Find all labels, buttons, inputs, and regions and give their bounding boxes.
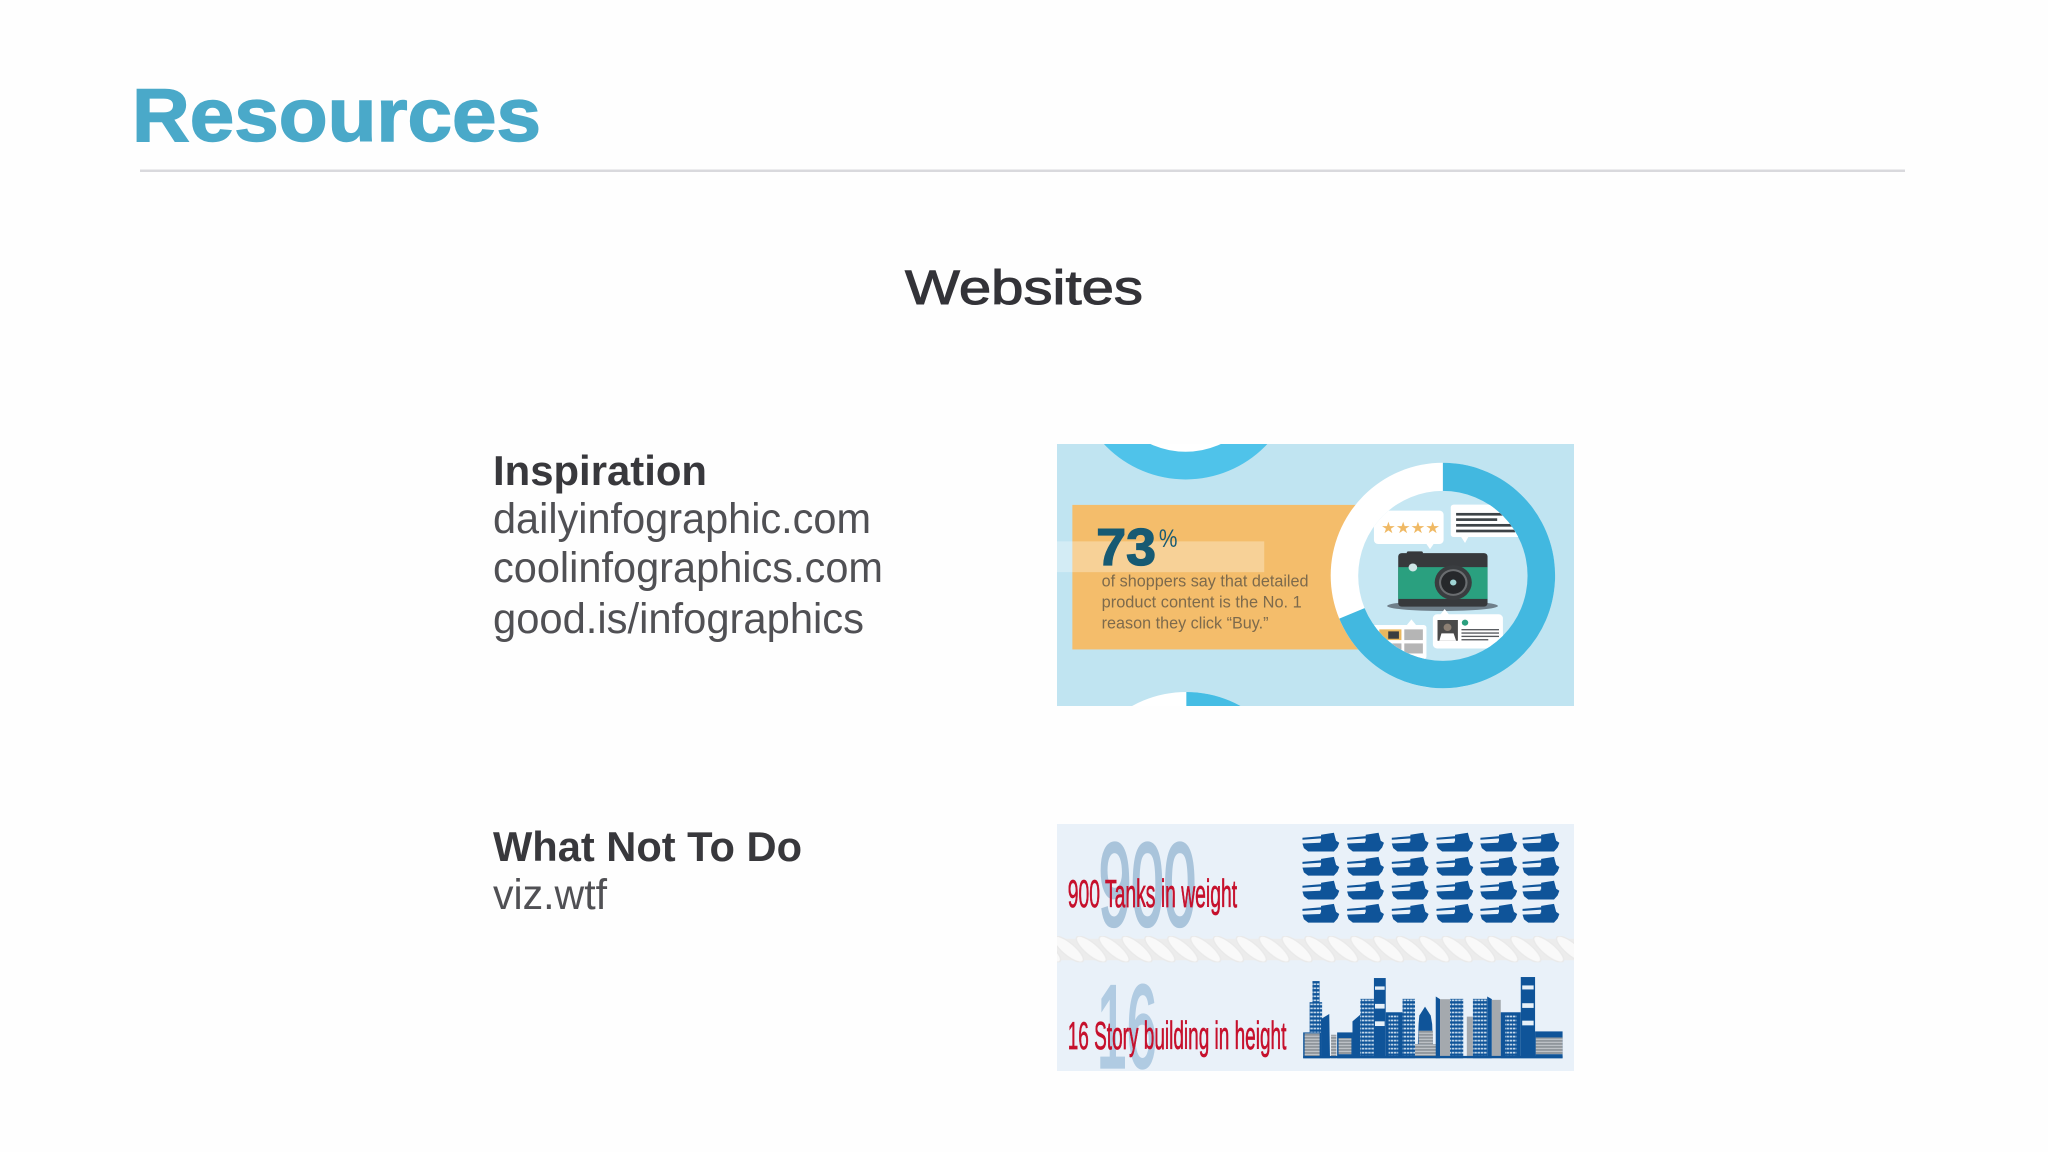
icon: camera	[1387, 551, 1498, 611]
orange callout box	[1072, 505, 1362, 649]
icon grid: tanks	[1302, 833, 1559, 923]
icon: city skyline	[1303, 977, 1563, 1058]
link: viz.wtf: viz.wtf	[493, 871, 608, 919]
translucent band	[1057, 541, 1264, 572]
stat: 73: 73	[1096, 519, 1156, 576]
bubble: text lines	[1451, 505, 1522, 543]
title divider	[140, 170, 1905, 172]
text block: inspiration	[493, 447, 883, 643]
stat description: product content is the No. 1	[1102, 592, 1302, 611]
bubble: thumbnails	[1372, 619, 1426, 659]
panel: tanks and buildings infographic thumbnail: 900	[1099, 819, 1196, 951]
heading: what not to do: What Not To Do	[493, 823, 802, 870]
bubble: star rating: ★★★★	[1381, 520, 1440, 537]
donut ring	[1331, 463, 1555, 688]
panel: tanks and buildings infographic thumbnail: 16 Story building in height	[1068, 1015, 1286, 1058]
heading: inspiration: Inspiration	[493, 447, 707, 494]
bottom donut arc	[1132, 692, 1240, 706]
title: Resources	[132, 73, 541, 157]
link: good.is: good.is/infographics	[493, 595, 864, 643]
icon: camera and review bubbles	[1372, 505, 1522, 659]
panel: 73% infographic thumbnail	[1057, 444, 1574, 706]
link: coolinfographics: coolinfographics.com	[493, 544, 883, 592]
top donut arc	[1104, 444, 1268, 480]
bubble: reviewer	[1433, 609, 1503, 648]
stat: percent sign: %	[1159, 524, 1177, 553]
stat description	[1102, 571, 1309, 632]
bubble: star rating	[1374, 511, 1444, 549]
panel: tanks and buildings infographic thumbnail	[1057, 819, 1574, 1092]
stat description: reason they click “Buy.”	[1102, 613, 1269, 632]
text block: what not to do	[493, 823, 802, 919]
panel background	[1057, 444, 1574, 706]
panel background	[1057, 824, 1574, 1071]
rope divider	[1057, 936, 1574, 962]
panel: tanks and buildings infographic thumbnail: 900 Tanks in weight	[1068, 873, 1237, 916]
panel: tanks and buildings infographic thumbnail: 16	[1097, 961, 1157, 1092]
link: dailyinfographic: dailyinfographic.com	[493, 495, 871, 543]
stat description: of shoppers say that detailed	[1102, 571, 1309, 590]
section heading: websites: Websites	[905, 262, 1143, 315]
